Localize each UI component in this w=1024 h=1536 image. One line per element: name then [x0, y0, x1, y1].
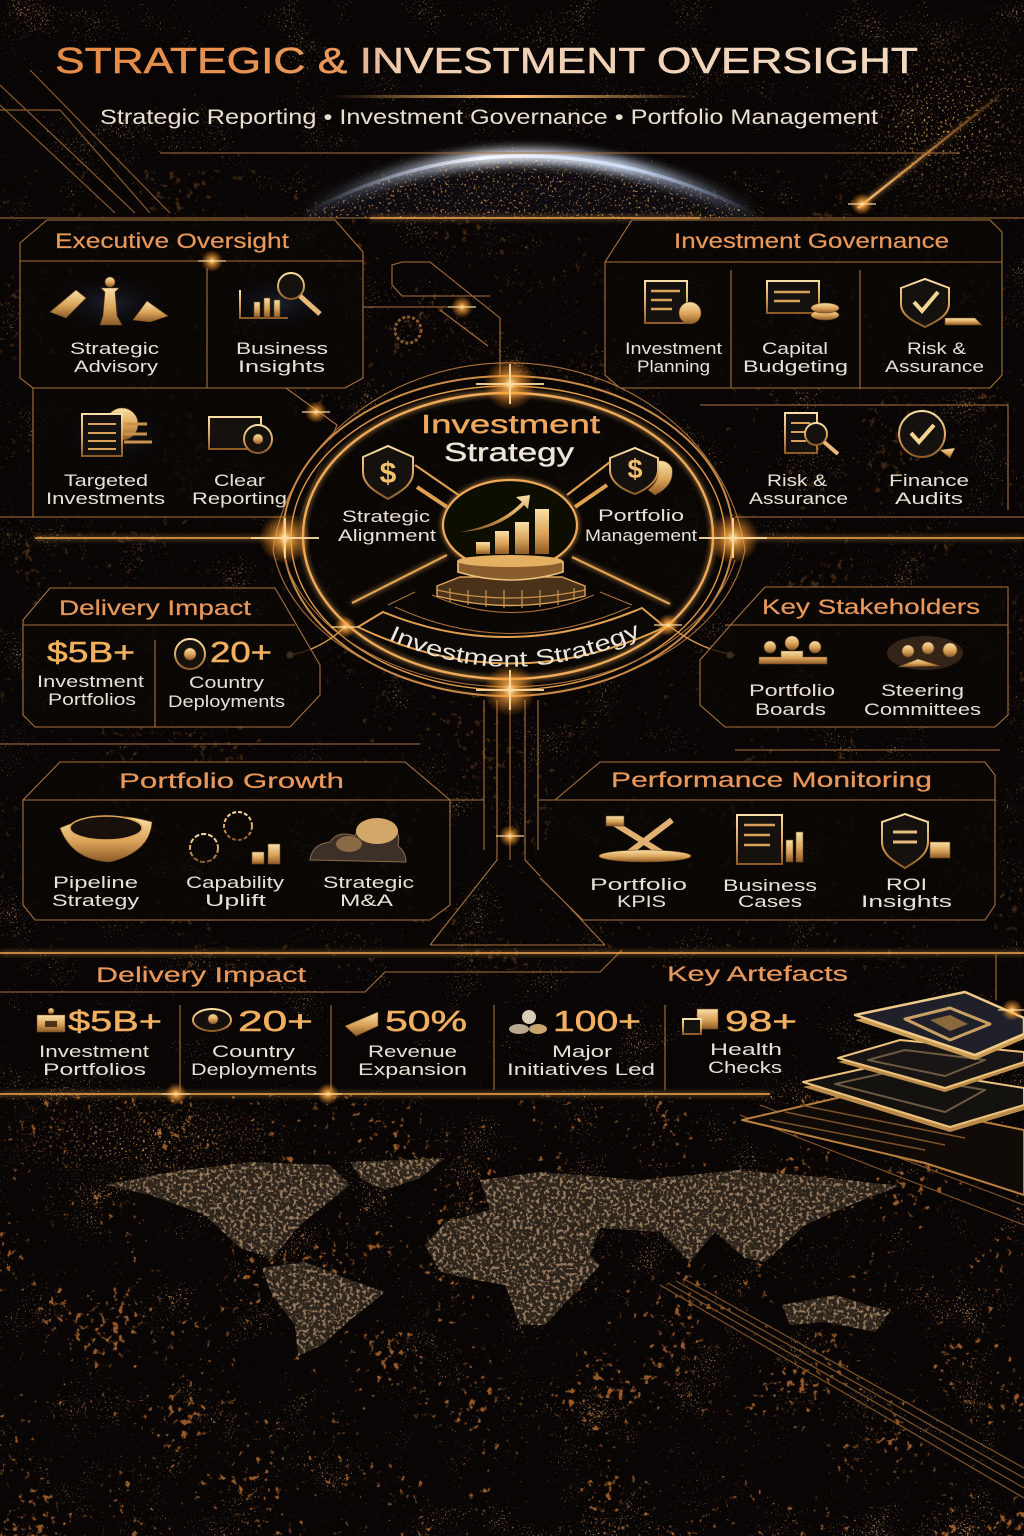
label: clear reporting: Clear [214, 471, 265, 490]
connector dots [287, 401, 735, 658]
metric: 98 plus: 98+ [725, 1006, 797, 1038]
decorative gear and circuit [363, 262, 500, 385]
icon: right shield: $ [627, 454, 643, 484]
label: capital budgeting [743, 339, 848, 376]
heading: investment strategy: Strategy [444, 437, 574, 467]
metric: 5B plus: Portfolios [48, 690, 136, 709]
heading: performance monitoring: Performance Monitoring [611, 769, 932, 792]
icon: business insights [220, 273, 340, 333]
label: strategic M&A [323, 873, 415, 910]
metric: 5B plus: $5B+ [68, 1006, 162, 1038]
label: portfolio management [585, 506, 697, 545]
icon: audit badge [899, 411, 955, 458]
title underline [330, 95, 700, 98]
panel: key stakeholders [700, 587, 1008, 727]
label: targeted investments: Investments [46, 489, 165, 508]
label: risk and assurance: Risk & [907, 339, 967, 358]
metric: 100 plus [507, 1006, 655, 1079]
metric: 20 plus: Country [189, 673, 265, 692]
label: capability uplift: Uplift [205, 891, 266, 910]
icon: steering committees [887, 636, 963, 670]
panel: investment governance [605, 220, 1002, 388]
label: strategic alignment [338, 507, 436, 545]
metric: 50 percent: 50% [385, 1006, 467, 1038]
metric: 20 plus [191, 1006, 317, 1079]
icon: pipeline bowl [60, 816, 152, 862]
label: steering committees: Steering [881, 681, 964, 700]
label: ROI insights: ROI [886, 875, 927, 894]
metric: 50 percent: Expansion [358, 1060, 467, 1079]
label: clear reporting [192, 471, 287, 508]
label: finance audits [889, 471, 969, 508]
label: capital budgeting: Capital [762, 339, 828, 358]
label: portfolio management: Portfolio [598, 506, 684, 525]
metric: 5B plus [37, 1006, 162, 1079]
label: finance audits: Finance [889, 471, 969, 490]
metric: 98 plus: Checks [708, 1058, 782, 1077]
label: portfolio KPIS: KPIS [617, 892, 666, 911]
main glowing axis lines [0, 218, 1024, 1094]
metric: 5B plus: $5B+ [47, 637, 135, 669]
icon: clipboard [59, 403, 171, 467]
icon: right shield [610, 448, 672, 495]
label: portfolio management: Management [585, 526, 697, 545]
label: strategic alignment: Alignment [338, 526, 436, 545]
label: capability uplift: Capability [186, 873, 285, 892]
heading: key stakeholders: Key Stakeholders [762, 596, 980, 619]
subtitle: Strategic Reporting • Investment Governance • Portfolio Management [100, 106, 878, 129]
metric: 50 percent [345, 1006, 467, 1079]
metric: 20 plus: Deployments [191, 1060, 317, 1079]
label: risk and assurance: Risk & [767, 471, 828, 490]
icon: magnifier [785, 413, 838, 454]
icon: growth globe with bars [388, 480, 632, 634]
planet horizon [300, 150, 760, 220]
metric: 100 plus: Major [552, 1042, 612, 1061]
label: risk and assurance: Assurance [749, 489, 848, 508]
label: capital budgeting: Budgeting [743, 357, 848, 376]
panel: performance monitoring [540, 762, 995, 920]
icon: cloud M&A [310, 818, 406, 862]
icon: investment planning [645, 281, 701, 324]
heading: key artefacts: Key Artefacts [667, 963, 848, 986]
icon: risk shield [901, 279, 982, 327]
label: business insights: Insights [238, 357, 325, 376]
lower center connectors [430, 700, 605, 945]
label: pipeline strategy: Strategy [52, 891, 140, 910]
comet streak top right [821, 14, 1024, 220]
label: strategic advisory: Strategic [70, 339, 160, 358]
label: business cases: Business [723, 876, 817, 895]
label: business cases [723, 876, 817, 911]
label: portfolio KPIS [590, 875, 687, 911]
icon: left shield: $ [380, 457, 397, 490]
label: pipeline strategy [52, 873, 140, 910]
heading: delivery impact: Delivery Impact [96, 964, 306, 987]
panel: portfolio growth [23, 762, 450, 920]
title: STRATEGIC & INVESTMENT OVERSIGHT [55, 40, 918, 81]
heading: delivery impact: Delivery Impact [59, 597, 251, 620]
metric: 20 plus [168, 637, 285, 711]
metric: 98 plus: Health [710, 1040, 782, 1059]
label: ROI insights: Insights [861, 892, 952, 911]
label: strategic alignment: Strategic [342, 507, 431, 526]
icon: chess king [45, 273, 175, 333]
panel: executive oversight [20, 220, 363, 388]
heading: portfolio growth: Portfolio Growth [119, 770, 344, 793]
metric: 100 plus: 100+ [553, 1006, 641, 1038]
banner: investment strategy: Investment Strategy [390, 625, 636, 667]
label: risk and assurance [885, 339, 984, 376]
label: risk and assurance: Assurance [885, 357, 984, 376]
metric: 100 plus: Initiatives Led [507, 1060, 655, 1079]
metric: 5B plus: Investment [39, 1042, 149, 1061]
icon: business case chart [720, 815, 820, 866]
label: business insights: Business [236, 339, 328, 358]
label: steering committees: Committees [864, 700, 981, 719]
label: portfolio boards [749, 681, 835, 719]
label: strategic advisory [70, 339, 160, 376]
perspective grid lines lower right [660, 1105, 1024, 1498]
panel: central investment strategy hub [251, 359, 767, 715]
world map [106, 1158, 900, 1356]
heading: investment strategy: Investment [421, 409, 601, 439]
label: strategic advisory: Advisory [74, 357, 159, 376]
label: finance audits: Audits [895, 489, 963, 508]
label: investment planning: Planning [637, 357, 710, 376]
metric: 5B plus: Investment [37, 672, 144, 691]
label: risk and assurance [749, 471, 848, 508]
metric: 20 plus: 20+ [238, 1006, 313, 1038]
top left circuit lines [0, 70, 170, 213]
band: delivery impact and key artefacts [37, 953, 996, 1105]
banner: investment strategy [356, 606, 665, 667]
panel: risk assurance and finance audits [700, 405, 1008, 510]
panel: targeted investments and clear reporting [33, 388, 337, 517]
panel: delivery impact upper [23, 588, 320, 727]
heading: investment strategy [421, 409, 601, 467]
metric: 20 plus: Deployments [168, 692, 285, 711]
label: strategic M&A: Strategic [323, 873, 415, 892]
label: targeted investments: Targeted [64, 471, 148, 490]
metric: 5B plus [37, 637, 144, 709]
label: investment planning [625, 339, 722, 376]
label: capability uplift [186, 873, 285, 910]
metric: 50 percent: Revenue [368, 1042, 457, 1061]
label: ROI insights [861, 875, 952, 911]
label: pipeline strategy: Pipeline [53, 873, 138, 892]
icon: KPI tools [599, 816, 691, 862]
label: business insights [236, 339, 328, 376]
label: steering committees [864, 681, 981, 719]
metric: 5B plus: Portfolios [43, 1060, 146, 1079]
label: portfolio boards: Portfolio [749, 681, 835, 700]
beams from shields [352, 462, 670, 604]
metric: 98 plus [683, 1006, 797, 1077]
label: portfolio boards: Boards [755, 700, 826, 719]
label: targeted investments [46, 471, 165, 508]
label: investment planning: Investment [625, 339, 722, 358]
heading: investment governance: Investment Governance [674, 230, 949, 253]
lower left glow of gold dust [0, 1092, 312, 1188]
metric: 20 plus: 20+ [210, 637, 272, 669]
icon: left shield [363, 446, 413, 499]
label: portfolio KPIS: Portfolio [590, 875, 687, 894]
icon: laptop report [190, 417, 275, 453]
horizontal frame lines [0, 153, 1024, 1094]
icon: capital budgeting [750, 281, 850, 325]
icon: boards [759, 636, 827, 664]
label: clear reporting: Reporting [192, 489, 287, 508]
label: business cases: Cases [738, 892, 802, 911]
icon: capability gears [190, 812, 295, 866]
icon: ROI shield [882, 814, 950, 868]
heading: executive oversight: Executive Oversight [55, 230, 289, 253]
icon: stacked artefact tiles [742, 992, 1024, 1195]
label: strategic M&A: M&A [340, 891, 394, 910]
metric: 20 plus: Country [212, 1042, 296, 1061]
